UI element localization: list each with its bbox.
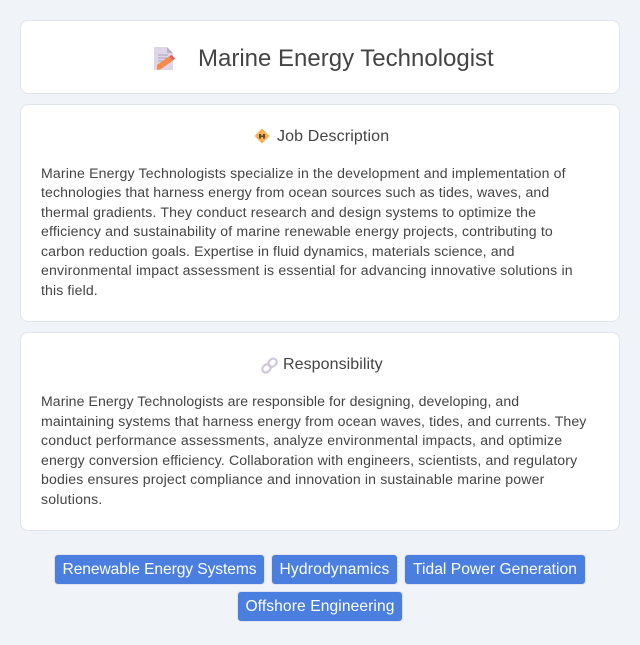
tag: offshore engineering [237,591,403,622]
text block: responsibility: solutions. [41,491,103,507]
text block: job description: this field. [41,282,98,298]
text block: job description: thermal gradients. They conduct research and design systems to optimize the [41,204,536,220]
tag: hydrodynamics: Hydrodynamics [279,561,390,578]
text block: job description [41,165,573,298]
text block: responsibility: conduct performance assessments, analyze environmental impacts, and optimize [41,432,562,448]
panel: responsibility [20,332,620,531]
text block: job description: carbon reduction goals. Expertise in fluid dynamics, materials science, and [41,243,515,259]
tag: hydrodynamics [271,554,398,585]
text block: job description: Marine Energy Technologists specialize in the development and implementation of [41,165,566,181]
text block: responsibility: bodies ensures project compliance and innovation in sustainable marine power [41,471,544,487]
text block: responsibility [41,393,586,507]
title: Marine Energy Technologist [198,45,494,72]
heading: job description: Job Description [277,128,389,145]
text block: job description: environmental impact assessment is essential for advancing innovative solutions in [41,262,573,278]
text block: job description: technologies that harness energy from ocean sources such as tides, waves, and [41,184,549,200]
panel: job description [20,104,620,322]
heading: responsibility: Responsibility [283,356,383,373]
text block: responsibility: energy conversion efficiency. Collaboration with engineers, scientists, and regulatory [41,452,577,468]
icon: orange diamond [254,128,270,144]
tag: renewable energy systems [54,554,265,585]
text block: responsibility: Marine Energy Technologists are responsible for designing, developing, and [41,393,519,409]
tag: offshore engineering: Offshore Engineering [245,598,395,615]
text block: job description: efficiency and sustainability of marine renewable energy projects, contributing to [41,223,553,239]
icon: chain link [261,357,278,374]
tag: renewable energy systems: Renewable Energy Systems [63,561,256,578]
panel: title header [20,20,620,94]
tag: tidal power generation: Tidal Power Generation [413,561,577,578]
text block: responsibility: maintaining systems that harness energy from ocean waves, tides, and currents. They [41,413,586,429]
icon: document with pencil [154,47,175,70]
tag: tidal power generation [404,554,586,585]
